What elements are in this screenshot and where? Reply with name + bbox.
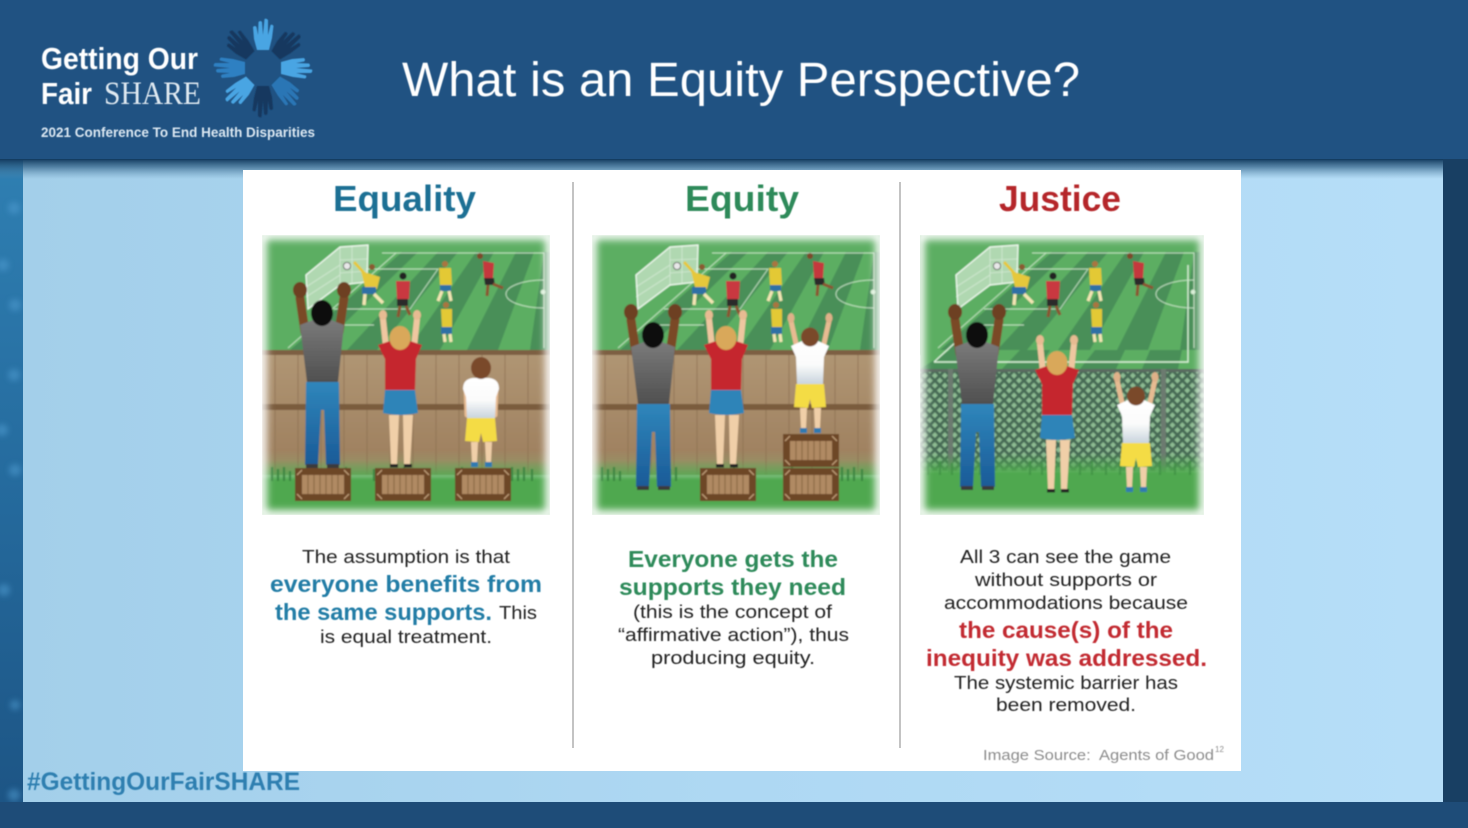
- image source credit: Image Source: Agents of Good: [983, 747, 1214, 764]
- heading: Equity: Equity: [685, 178, 799, 219]
- logo wordmark: Getting Our: [41, 41, 198, 76]
- panel: equity: [592, 178, 880, 668]
- text: equality explanation: the same supports.: [275, 599, 492, 625]
- bottom band: [0, 802, 1468, 828]
- text: equity explanation: [618, 546, 849, 668]
- logo wordmark: SHARE: [104, 76, 201, 112]
- heading: Equality: Equality: [333, 178, 476, 219]
- text: equality explanation: is equal treatment.: [320, 627, 492, 647]
- logo tagline: 2021 Conference To End Health Disparities: [41, 124, 315, 140]
- title: What is an Equity Perspective?: [402, 54, 1080, 107]
- hashtag: #GettingOurFairSHARE: [27, 768, 300, 796]
- image source credit: 12: [1215, 745, 1224, 754]
- text: justice explanation: accommodations because: [944, 593, 1188, 613]
- text: equity explanation: supports they need: [619, 574, 846, 600]
- text: equality explanation: The assumption is that: [302, 547, 510, 567]
- text: justice explanation: All 3 can see the game: [960, 547, 1171, 567]
- text: equality explanation: everyone benefits from: [270, 571, 542, 597]
- panel: justice: [912, 178, 1224, 764]
- text: justice explanation: without supports or: [974, 570, 1157, 590]
- panel: equality: [262, 178, 550, 647]
- icon: circle of hands: [214, 19, 312, 117]
- text: equity explanation: (this is the concept of: [633, 602, 833, 622]
- header band: [0, 0, 1468, 179]
- text: equity explanation: Everyone gets the: [628, 546, 838, 572]
- text: equity explanation: “affirmative action”), thus: [618, 625, 849, 645]
- text: justice explanation: inequity was addressed.: [926, 645, 1207, 671]
- white card: [243, 170, 1241, 771]
- logo wordmark: [41, 41, 201, 112]
- left patterned strip: [0, 160, 23, 802]
- illustration: equity scene: [592, 235, 880, 515]
- text: justice explanation: been removed.: [996, 695, 1136, 715]
- illustration: justice scene: [912, 235, 1204, 515]
- logo wordmark: Fair: [41, 76, 92, 111]
- text: equality explanation: This: [499, 603, 537, 623]
- text: justice explanation: the cause(s) of the: [959, 617, 1173, 643]
- light blue content panel: [23, 160, 1443, 802]
- logo: [41, 19, 315, 140]
- text: justice explanation: [926, 547, 1207, 715]
- column dividers: [573, 182, 900, 748]
- text: equality explanation: [270, 547, 542, 647]
- heading: Justice: Justice: [999, 178, 1121, 219]
- text: equity explanation: producing equity.: [651, 648, 815, 668]
- right dark strip: [1443, 158, 1468, 828]
- text: justice explanation: The systemic barrier has: [954, 673, 1178, 693]
- illustration: equality scene: [262, 235, 550, 515]
